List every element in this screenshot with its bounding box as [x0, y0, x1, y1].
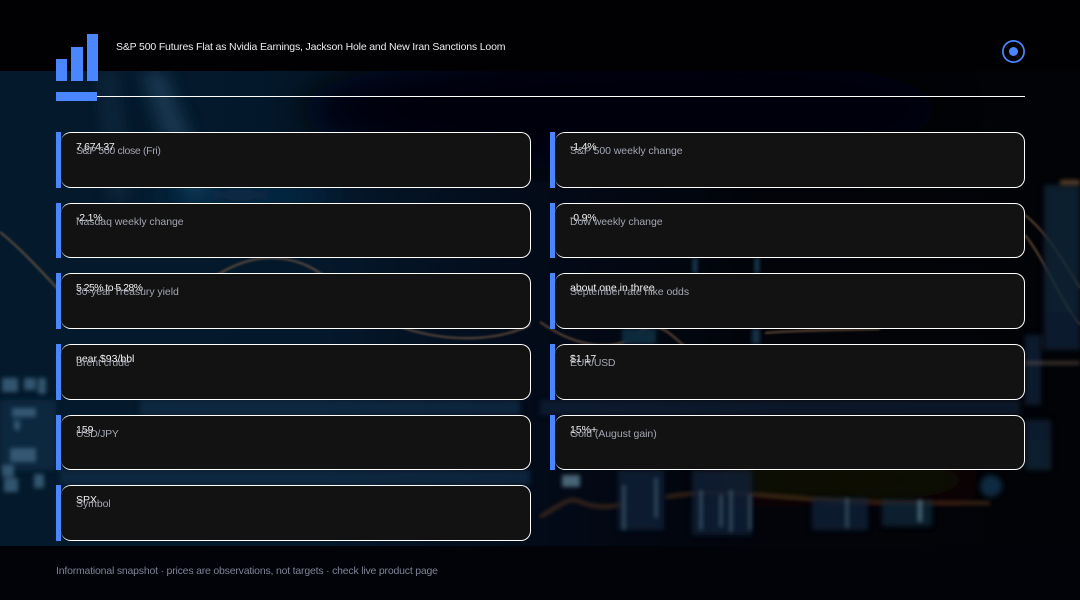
card: S&P 500 weekly change: S&P 500 weekly change [570, 145, 683, 157]
icon: target circle [1002, 40, 1025, 63]
card: Symbol [56, 485, 531, 541]
card: 30-year Treasury yield: 5.25% to 5.28% [76, 282, 142, 294]
footer note: Informational snapshot · prices are observations, not targets · check live product page [56, 565, 438, 577]
card: S&P 500 weekly change [550, 132, 1025, 188]
card: S&P 500 weekly change: -1.4% [570, 141, 596, 153]
title: S&P 500 Futures Flat as Nvidia Earnings, Jackson Hole and New Iran Sanctions Loom [116, 41, 505, 53]
market lines [0, 215, 1080, 372]
top and bottom dark bands [0, 0, 1080, 71]
card: September rate hike odds [550, 273, 1025, 329]
card: Brent crude [56, 344, 531, 400]
card: September rate hike odds: about one in three [570, 282, 655, 294]
card: Nasdaq weekly change: -2.1% [76, 212, 102, 224]
card: Dow weekly change [550, 203, 1025, 258]
card: USD/JPY [56, 415, 531, 470]
card: EUR/USD: $1.17 [570, 353, 596, 365]
card: EUR/USD: EUR/USD [570, 357, 615, 369]
card: Gold August gain: 15%+ [570, 424, 597, 436]
card: 30-year Treasury yield: 30-year Treasury yield [76, 286, 179, 298]
card: EUR/USD [550, 344, 1025, 400]
card: Brent crude: Brent crude [76, 357, 130, 369]
card: USD/JPY: 159 [76, 424, 94, 436]
card: Gold August gain [550, 415, 1025, 470]
card: S&P 500 close: 7,674.37 [76, 141, 114, 153]
card: Nasdaq weekly change: Nasdaq weekly change [76, 216, 184, 228]
card: Brent crude: near $93/bbl [76, 353, 134, 365]
card: Symbol: SPX [76, 494, 97, 506]
card: Dow weekly change: -0.9% [570, 212, 596, 224]
header rule with accent [56, 92, 1025, 101]
card: Gold August gain: Gold (August gain) [570, 428, 657, 440]
card: USD/JPY: USD/JPY [76, 428, 119, 440]
card: S&P 500 close: S&P 500 close (Fri) [76, 145, 161, 157]
card: Nasdaq weekly change [56, 203, 531, 258]
card: Symbol: Symbol [76, 498, 111, 510]
card: 30-year Treasury yield [56, 273, 531, 329]
card: S&P 500 close [56, 132, 531, 188]
logo icon: bar chart [56, 34, 98, 81]
blurred city blocks [0, 185, 1080, 535]
card: September rate hike odds: September rate hike odds [570, 286, 689, 298]
card: Dow weekly change: Dow weekly change [570, 216, 663, 228]
